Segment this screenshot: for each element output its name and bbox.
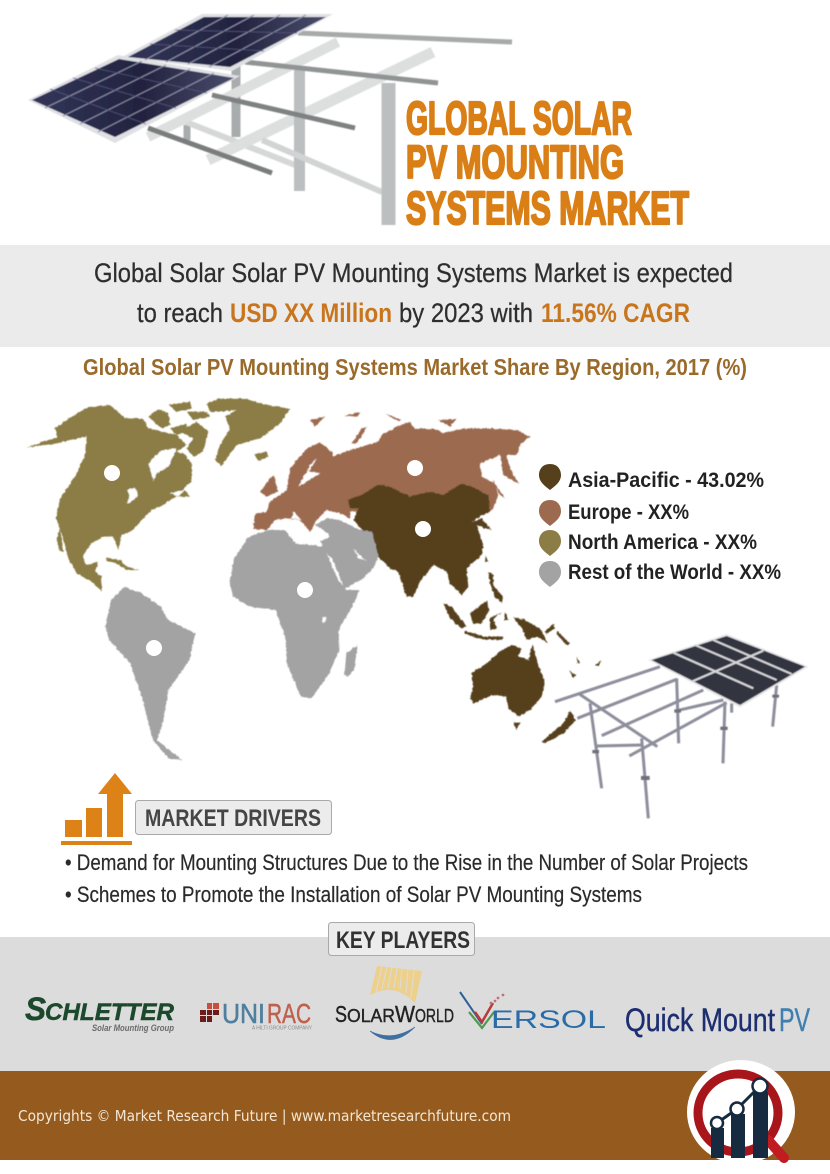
legend: Rest of the World - XX%: [568, 561, 781, 584]
logo: Versol: [460, 992, 606, 1034]
panel: key players: [0, 922, 830, 1071]
icon: Market Research Future logo: [687, 1060, 795, 1164]
map markers: [104, 460, 431, 656]
market drivers label: [136, 800, 332, 834]
panel: headline band: to reach: [137, 298, 223, 328]
logo: Schletter: Solar Mounting Group: [92, 1023, 174, 1033]
logo: Unirac: [200, 998, 313, 1032]
panel: headline band: by 2023 with: [399, 298, 533, 328]
title: GLOBAL SOLAR: [406, 92, 632, 144]
title: PV MOUNTING: [406, 136, 624, 188]
legend: Europe - XX%: [568, 501, 689, 524]
title: SYSTEMS MARKET: [406, 182, 689, 234]
logo: Quick Mount PV: Quick Mount: [625, 1002, 775, 1038]
panel: headline band: 11.56% CAGR: [541, 298, 690, 328]
key players label: [328, 922, 474, 956]
legend: Asia-Pacific - 43.02%: [568, 469, 764, 492]
world map: [27, 398, 601, 760]
panel: headline band: USD XX Million: [230, 298, 392, 328]
legend: North America - XX%: [568, 531, 757, 554]
logo: Quick Mount PV: PV: [779, 1002, 810, 1038]
region: Rest of the World: [105, 518, 378, 760]
illustration: solar panel mounting structure: [28, 14, 512, 225]
market drivers label: MARKET DRIVERS: [145, 805, 321, 832]
region: Europe and Russia: [253, 412, 530, 532]
panel: headline band: [0, 245, 830, 347]
logo: Schletter: CHLETTER: [45, 999, 175, 1026]
logo: SolarWorld: W: [395, 1001, 415, 1027]
illustration: ground-mounted solar array: [555, 634, 808, 818]
key players label: KEY PLAYERS: [336, 927, 470, 954]
copyright text: Copyrights © Market Research Future | www.marketresearchfuture.com: [18, 1107, 511, 1125]
logo: Unirac: A HILTI GROUP COMPANY: [252, 1026, 313, 1032]
logo: Unirac: UNI: [222, 998, 265, 1029]
icon: growth bars with arrow: [61, 773, 132, 845]
region: Asia-Pacific: [348, 483, 601, 743]
market drivers list: [65, 850, 748, 907]
logo: SolarWorld: ORLD: [415, 1005, 454, 1026]
title: [406, 92, 689, 234]
legend: [539, 464, 781, 587]
panel: headline band: Global Solar Solar PV Mounting Systems Market is expected: [94, 258, 733, 288]
region: North America: [27, 398, 290, 592]
logo: SolarWorld: OLAR: [347, 1005, 395, 1026]
logo: Unirac: RAC: [267, 998, 311, 1029]
section heading: market share by region: Global Solar PV Mounting Systems Market Share By Region, 2017 (%): [83, 354, 747, 380]
logo: Schletter: [25, 991, 175, 1033]
logo: Versol: ERSOL: [491, 1006, 606, 1034]
panel: footer band: [0, 1071, 830, 1160]
logo: SolarWorld: [335, 966, 454, 1040]
logo: Schletter: S: [25, 991, 47, 1027]
market drivers list: • Schemes to Promote the Installation of Solar PV Mounting Systems: [65, 882, 642, 907]
logo: SolarWorld: S: [335, 1001, 347, 1027]
